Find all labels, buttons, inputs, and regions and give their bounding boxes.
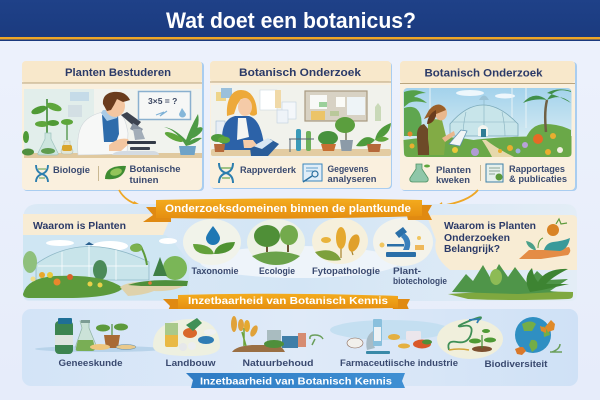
icon: flask with sprout xyxy=(410,164,430,182)
panel: toepassingen xyxy=(22,309,578,386)
icon: DNA xyxy=(36,165,48,182)
panel: onderzoeksdomeinen xyxy=(23,204,577,301)
application: Geneeskunde: Geneeskunde xyxy=(58,358,122,368)
application: Farmaceutiische industrie xyxy=(330,319,458,368)
scientist xyxy=(78,92,130,155)
arrow: links naar lint xyxy=(119,190,142,207)
illustration: scientist with microscope xyxy=(22,89,204,158)
potted plants xyxy=(318,117,391,152)
illustration: greenhouse with explorer xyxy=(404,88,572,157)
garden xyxy=(404,136,572,157)
domain: Ecologie: Ecologie xyxy=(259,266,295,276)
left heading block xyxy=(23,214,172,235)
label: Rappverderk: Rappverderk xyxy=(240,165,297,175)
label: Planten kweken xyxy=(436,165,471,185)
label: Gegevens analyseren: Gegevens xyxy=(328,164,368,174)
icon: DNA xyxy=(219,163,233,183)
illustration: greenhouse garden xyxy=(23,235,189,300)
heading: Planten Bestuderen xyxy=(65,67,171,79)
icon: hand with plant xyxy=(519,219,570,259)
icon: report xyxy=(486,164,503,182)
label: Botanische tuinen: Botanische xyxy=(130,164,180,174)
small potted plant xyxy=(211,134,230,152)
label: Gegevens analyseren: analyseren xyxy=(328,174,376,184)
application: Biodiversiteit xyxy=(484,317,562,369)
domain: Plant-biotechologie xyxy=(373,218,447,286)
title banner xyxy=(0,0,600,41)
glass dome xyxy=(450,96,518,137)
label: Planten kweken: kweken xyxy=(436,175,470,185)
ribbon: Onderzoeksdomeinen xyxy=(143,198,432,222)
panel: Botanisch Onderzoek (midden) xyxy=(210,61,392,189)
domain: Taxonomie: Taxonomie xyxy=(192,266,238,276)
label: Rapportages & publicaties xyxy=(509,164,567,184)
researcher xyxy=(222,90,279,156)
ribbon: Inzetbaarheid (oranje): Inzetbaarheid van Botanisch Kennis xyxy=(188,295,388,307)
label: Rapportages & publicaties: Rapportages xyxy=(509,164,565,174)
heading: Botanisch Onderzoek xyxy=(239,67,362,79)
illustration: green plants xyxy=(448,264,573,300)
microscope xyxy=(112,112,159,155)
application: Natuurbehoud: Natuurbehoud xyxy=(242,358,314,368)
label: Botanische tuinen xyxy=(130,164,180,185)
ribbon: Onderzoeksdomeinen: Onderzoeksdomeinen binnen de plantkunde xyxy=(165,203,411,215)
icon: leaf xyxy=(105,166,126,179)
application: Natuurbehoud xyxy=(231,316,323,368)
question text: Belangrijk? xyxy=(444,244,500,255)
pin board xyxy=(305,91,381,121)
right question block xyxy=(428,215,577,270)
label: Biologie: Biologie xyxy=(53,165,90,175)
left heading block: Waarom is Planten xyxy=(33,221,126,232)
arrow: rechts naar lint xyxy=(434,190,478,209)
ribbon: Inzetbaarheid (blauw) xyxy=(186,373,405,388)
illustration: researcher at desk xyxy=(211,85,391,158)
domain: Fytopathologie xyxy=(312,218,380,276)
application: Landbouw: Landbouw xyxy=(166,358,217,368)
ribbon: Inzetbaarheid (oranje) xyxy=(163,294,410,313)
icon: magnifier on report xyxy=(303,164,322,182)
label: Gegevens analyseren xyxy=(328,164,376,184)
panel: Planten Bestuderen xyxy=(22,61,204,191)
palms xyxy=(404,89,571,136)
application: Geneeskunde xyxy=(35,318,165,368)
application: Farmaceutiische industrie: Farmaceutiische industrie xyxy=(340,358,458,368)
domain: Taxonomie xyxy=(183,219,241,276)
domain: Fytopathologie: Fytopathologie xyxy=(312,266,380,276)
test tubes xyxy=(289,129,314,152)
domain: Plant-biotechologie: Plant- xyxy=(393,266,421,276)
application: DNA en plant xyxy=(437,317,503,359)
label: Botanische tuinen: tuinen xyxy=(130,175,158,185)
question text: Onderzoeken xyxy=(444,233,510,244)
heading: Botanisch Onderzoek xyxy=(424,68,543,80)
application: Landbouw xyxy=(153,318,220,368)
title: Wat doet een botanicus? xyxy=(166,8,416,33)
notes xyxy=(216,88,296,135)
panel: Botanisch Onderzoek (rechts) xyxy=(400,61,577,191)
domain: Ecologie xyxy=(247,219,305,276)
ribbon: Inzetbaarheid (blauw): Inzetbaarheid van Botanisch Kennis xyxy=(200,376,392,388)
domain: Plant-biotechologie: biotechologie xyxy=(393,276,447,286)
chalkboard xyxy=(138,92,190,120)
label: Rapportages & publicaties: & publicaties xyxy=(509,174,567,184)
question text: Waarom is Planten xyxy=(444,221,536,232)
label: Planten kweken: Planten xyxy=(436,165,471,175)
chalkboard: 3×5 = ? xyxy=(148,96,177,106)
explorer xyxy=(417,105,467,155)
question text xyxy=(444,221,536,255)
potted plant xyxy=(164,114,204,155)
application: Biodiversiteit: Biodiversiteit xyxy=(484,359,548,369)
plant in flask xyxy=(22,99,73,156)
